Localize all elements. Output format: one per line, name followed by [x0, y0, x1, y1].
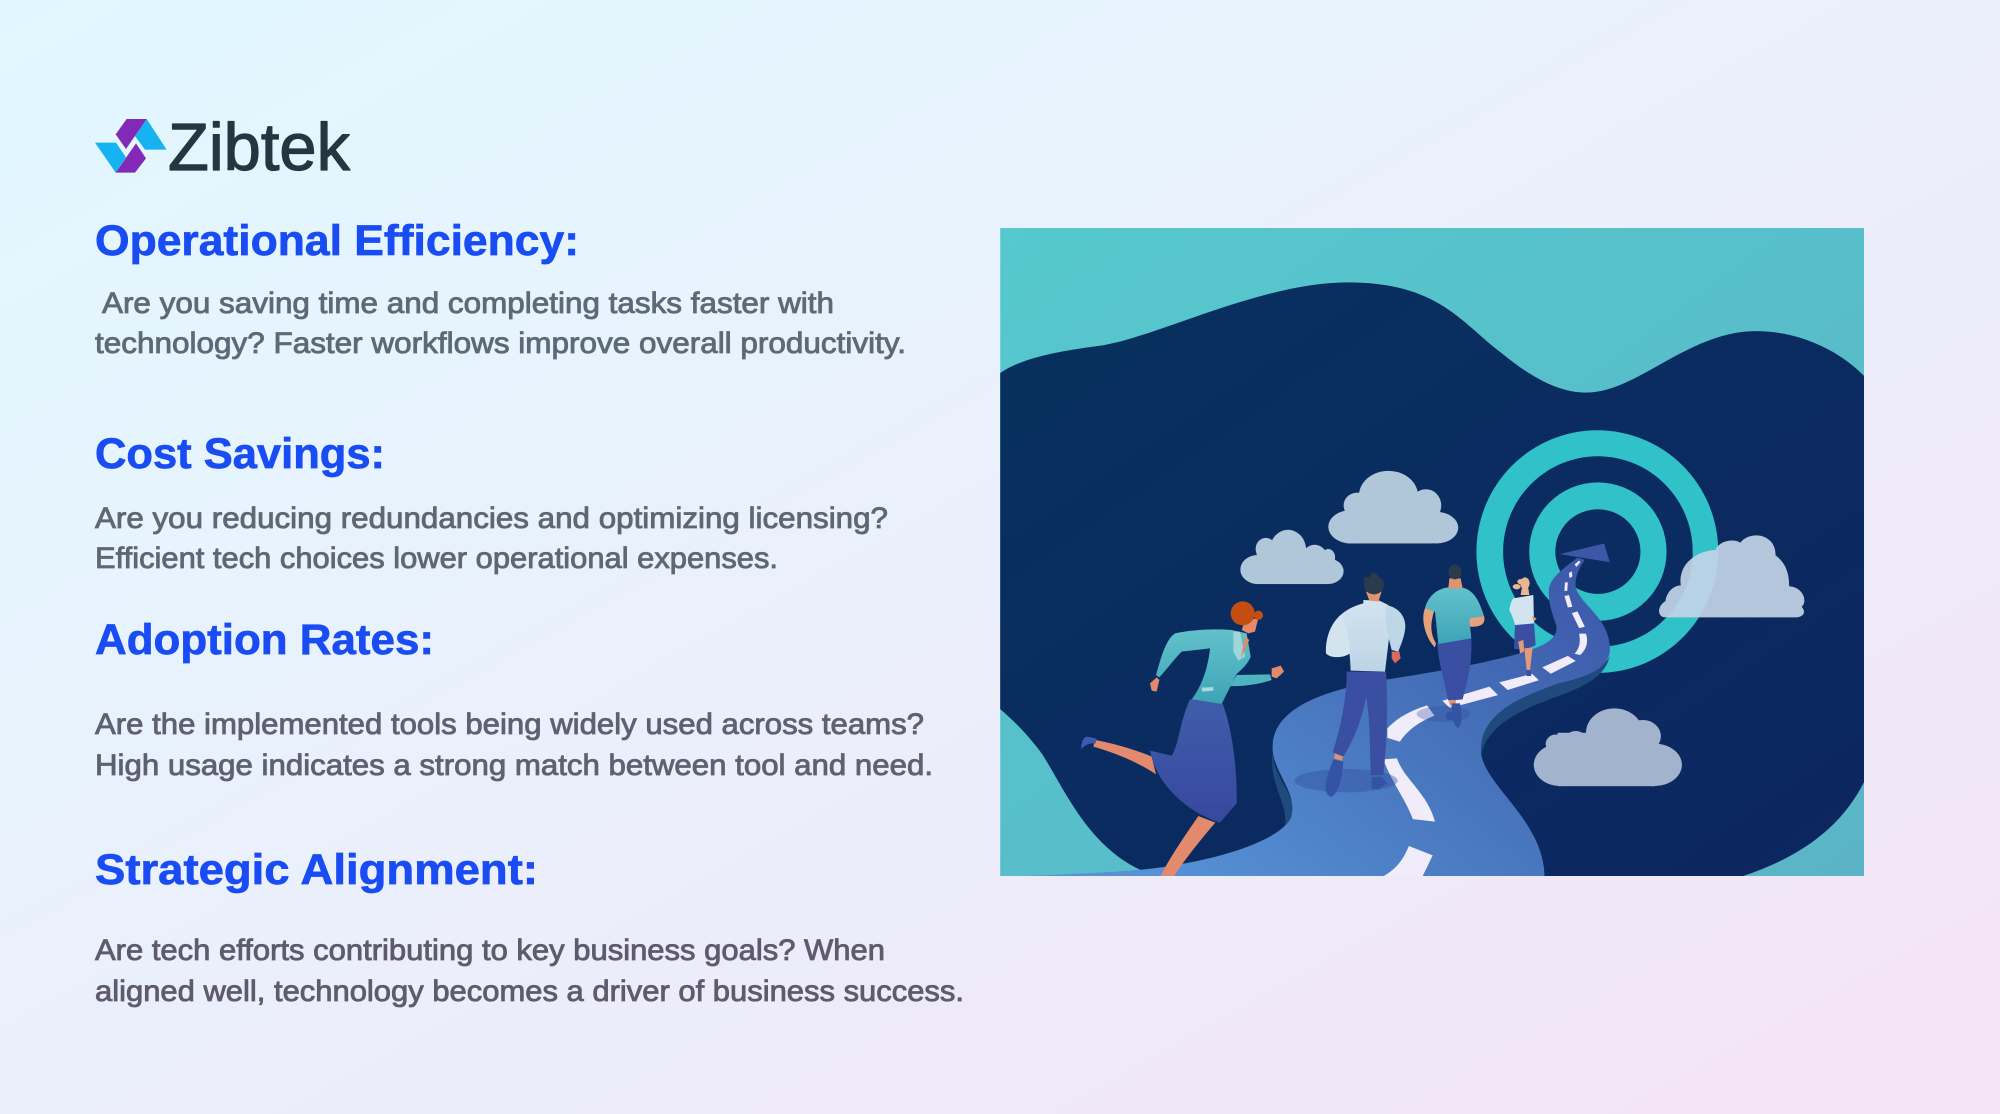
body text: Are you saving time and completing tasks faster with [102, 287, 834, 320]
body text [95, 934, 964, 1008]
heading: Cost Savings: [95, 430, 385, 478]
body text: Are tech efforts contributing to key business goals? When [95, 934, 885, 967]
icon: Zibtek mark [95, 119, 167, 173]
cloud: lower right [1534, 708, 1682, 786]
logo [95, 110, 350, 185]
section: Cost Savings [95, 430, 888, 575]
body text: aligned well, technology becomes a driver of business success. [95, 975, 964, 1008]
heading: Strategic Alignment: [95, 846, 538, 894]
road [1018, 558, 1610, 876]
body text [95, 708, 933, 782]
figure: man in white shirt [1294, 573, 1405, 797]
cloud: right, translucent over rings [1659, 535, 1804, 617]
road edge shadows [1272, 656, 1610, 827]
body text: technology? Faster workflows improve overall productivity. [95, 327, 906, 360]
navy blob [1000, 282, 1864, 876]
road dashes [1383, 561, 1587, 876]
heading: Operational Efficiency: [95, 217, 579, 265]
target rings [1476, 430, 1718, 673]
section: Operational Efficiency [95, 217, 906, 360]
section: Strategic Alignment [95, 846, 964, 1008]
heading: Adoption Rates: [95, 616, 434, 664]
body text [95, 502, 888, 575]
road arrow head [1560, 543, 1610, 562]
body text: Are you reducing redundancies and optimizing licensing? [95, 502, 888, 535]
wordmark: Zibtek [168, 110, 350, 185]
teal background panel [1000, 228, 1864, 876]
body text: Are the implemented tools being widely used across teams? [95, 708, 924, 741]
cloud: top [1328, 471, 1458, 543]
section: Adoption Rates [95, 616, 933, 782]
body text: Efficient tech choices lower operational expenses. [95, 542, 778, 575]
figures [1081, 565, 1537, 877]
body text: High usage indicates a strong match between tool and need. [95, 749, 933, 782]
illustration: team running along a road towards a target [1000, 228, 1864, 877]
body text [95, 287, 906, 360]
figure: woman running [1081, 601, 1284, 877]
figure: distant runner [1509, 577, 1537, 676]
figure: man in teal shirt [1417, 565, 1484, 728]
cloud: left [1240, 530, 1344, 584]
